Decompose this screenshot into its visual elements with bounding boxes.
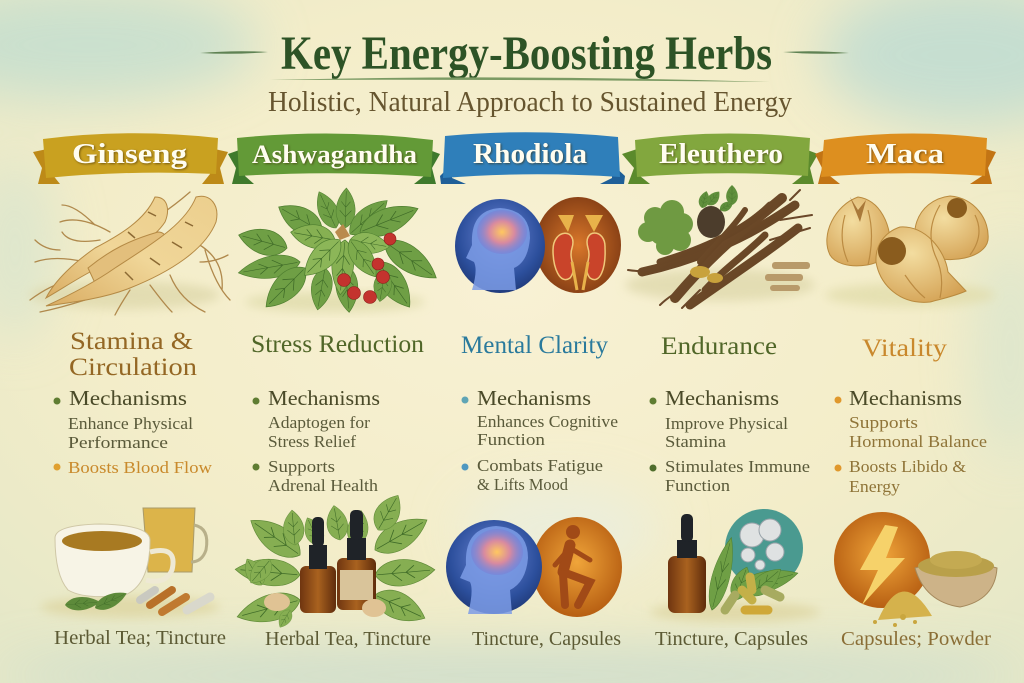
banner: Eleuthero: Eleuthero — [659, 139, 783, 170]
column 1 benefit: Stamina & Circulation: Stamina & — [70, 328, 193, 355]
column 3 benefit: Mental Clarity: Mental Clarity — [461, 332, 608, 359]
column 3 benefit: Mental Clarity: & Lifts Mood — [477, 475, 568, 494]
column 4 benefit: Endurance — [650, 333, 810, 495]
column 4 benefit: Endurance: Stimulates Immune — [665, 457, 810, 476]
column 5 benefit: Vitality: Vitality — [862, 335, 948, 362]
column 1 benefit: Stamina & Circulation — [54, 328, 213, 477]
banner: Ginseng — [33, 133, 228, 184]
column 2 benefit: Stress Reduction: Mechanisms — [268, 386, 380, 410]
column 4 benefit: Endurance: Stamina — [665, 432, 726, 451]
banner: Ashwagandha: Ashwagandha — [252, 140, 417, 169]
column 4 benefit: Endurance: Improve Physical — [665, 414, 788, 433]
column 5 benefit: Vitality: Mechanisms — [849, 386, 962, 410]
column 5 benefit: Vitality: Energy — [849, 477, 901, 496]
column 1 benefit: Stamina & Circulation: Boosts Blood Flow — [68, 458, 213, 477]
banner: Ginseng: Ginseng — [72, 139, 187, 170]
forms: Capsules; Powder: Capsules; Powder — [841, 628, 991, 650]
column 2 benefit: Stress Reduction: Stress Reduction — [251, 331, 425, 358]
illustration: ginseng roots — [30, 192, 230, 315]
banner: Rhodiola: Rhodiola — [473, 139, 587, 170]
column 5 benefit: Vitality: Hormonal Balance — [849, 432, 987, 451]
banner: Maca — [815, 133, 996, 184]
column 1 benefit: Stamina & Circulation: Performance — [68, 433, 168, 452]
illustration: tincture bottle, cell circle and capsules — [650, 509, 820, 622]
banner: Rhodiola — [440, 132, 625, 184]
illustration: leaves, tincture bottles and capsules — [234, 490, 436, 630]
illustration: rhodiola brain and kidneys — [455, 197, 621, 293]
column 5 benefit: Vitality: Supports — [849, 413, 918, 432]
column 1 benefit: Stamina & Circulation: Circulation — [69, 354, 198, 381]
column 5 benefit: Vitality — [834, 335, 987, 496]
column 2 benefit: Stress Reduction: Adaptogen for — [268, 413, 370, 432]
illustration: tea cup, glass and capsules — [40, 508, 220, 618]
column 1 benefit: Stamina & Circulation: Mechanisms — [69, 386, 187, 410]
title: Key Energy-Boosting Herbs — [281, 27, 772, 80]
column 3 benefit: Mental Clarity — [461, 332, 618, 494]
column 3 benefit: Mental Clarity: Enhances Cognitive — [477, 412, 618, 431]
illustration: ashwagandha leaves and berries — [235, 188, 443, 316]
column 2 benefit: Stress Reduction: Adrenal Health — [268, 476, 379, 495]
column 3 benefit: Mental Clarity: Function — [477, 430, 546, 449]
forms: Herbal Tea, Tincture: Herbal Tea, Tincture — [265, 628, 431, 650]
forms: Herbal Tea; Tincture: Herbal Tea; Tincture — [54, 627, 226, 649]
column 4 benefit: Endurance: Mechanisms — [665, 386, 779, 410]
illustration: lightning bolt, bowl and powder — [834, 512, 997, 627]
banner: Maca: Maca — [866, 139, 944, 170]
column 2 benefit: Stress Reduction: Stress Relief — [268, 432, 356, 451]
illustration: eleuthero roots and herbs — [625, 185, 815, 308]
forms: Tincture, Capsules: Tincture, Capsules — [472, 628, 621, 650]
column 1 benefit: Stamina & Circulation: Enhance Physical — [68, 414, 193, 433]
illustration: maca roots — [825, 196, 995, 307]
column 4 benefit: Endurance: Endurance — [661, 333, 777, 360]
column 4 benefit: Endurance: Function — [665, 476, 731, 495]
column 5 benefit: Vitality: Boosts Libido & — [849, 457, 966, 476]
banner: Eleuthero — [622, 133, 818, 184]
column 3 benefit: Mental Clarity: Combats Fatigue — [477, 456, 603, 475]
column 3 benefit: Mental Clarity: Mechanisms — [477, 386, 591, 410]
column 2 benefit: Stress Reduction: Supports — [268, 457, 335, 476]
subtitle: Holistic, Natural Approach to Sustained Energy — [268, 87, 792, 118]
illustration: brain and runner — [446, 517, 622, 617]
column 2 benefit: Stress Reduction — [251, 331, 425, 495]
forms: Tincture, Capsules: Tincture, Capsules — [655, 628, 808, 650]
banner: Ashwagandha — [228, 133, 440, 184]
